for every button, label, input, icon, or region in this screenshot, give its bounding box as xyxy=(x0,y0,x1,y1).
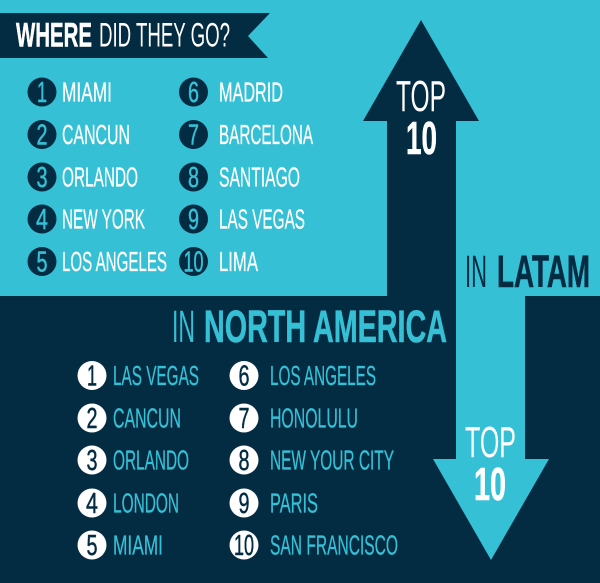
item 2: CANCUN xyxy=(113,402,181,434)
item 7: 7 xyxy=(188,120,199,152)
down arrow label: top 10: 10 xyxy=(474,458,506,510)
item 9: PARIS xyxy=(270,488,318,518)
heading: in latam xyxy=(465,246,590,297)
item 2: 2 xyxy=(36,120,48,152)
item 8: 8 xyxy=(188,162,199,194)
item 6 xyxy=(230,360,376,392)
item 8 xyxy=(230,444,394,477)
item 8: 8 xyxy=(238,445,250,477)
item 6: 6 xyxy=(188,77,199,109)
item 7 xyxy=(179,119,313,152)
item 5: 5 xyxy=(86,530,98,562)
banner: where did they go: DID THEY GO? xyxy=(99,16,230,54)
item 1: 1 xyxy=(87,360,97,392)
item 6: MADRID xyxy=(219,76,283,108)
banner: where did they go: WHERE xyxy=(16,16,92,54)
heading: in north america xyxy=(172,301,447,352)
item 6 xyxy=(179,76,283,109)
dark lower panel with up arrow xyxy=(0,20,479,583)
item 1: 1 xyxy=(37,77,47,109)
heading: in north america: NORTH AMERICA xyxy=(204,301,447,352)
item 9: LAS VEGAS xyxy=(219,204,305,234)
heading: in latam: IN xyxy=(465,246,487,297)
item 8: NEW YOUR CITY xyxy=(270,444,394,476)
item 7: BARCELONA xyxy=(219,119,313,150)
item 10: LIMA xyxy=(219,246,258,277)
item 8 xyxy=(179,162,300,194)
item 3 xyxy=(28,162,138,194)
item 6: LOS ANGELES xyxy=(270,360,376,391)
item 4: 4 xyxy=(36,204,48,236)
heading: in north america: IN xyxy=(172,301,195,352)
item 9: 9 xyxy=(188,204,199,236)
item 8: SANTIAGO xyxy=(219,162,300,192)
down arrow label: top 10 xyxy=(465,418,516,510)
list: north america destinations xyxy=(78,360,398,562)
item 1: MIAMI xyxy=(62,76,112,108)
down arrow xyxy=(433,296,549,560)
banner: where did they go xyxy=(0,13,270,58)
up arrow label: top 10: 10 xyxy=(406,112,437,164)
dark lower right panel xyxy=(456,296,600,583)
item 4: LONDON xyxy=(113,488,179,518)
item 3: 3 xyxy=(36,162,48,194)
item 4: 4 xyxy=(86,488,98,520)
item 7 xyxy=(230,402,358,435)
item 10 xyxy=(230,530,398,562)
item 9 xyxy=(230,488,318,520)
item 2 xyxy=(78,402,181,435)
item 5: 5 xyxy=(36,246,48,278)
item 4 xyxy=(78,488,179,520)
item 10: SAN FRANCISCO xyxy=(270,530,398,560)
item 2 xyxy=(28,119,130,152)
item 1: LAS VEGAS xyxy=(113,360,199,391)
list: latam destinations xyxy=(28,76,313,278)
item 5: LOS ANGELES xyxy=(62,246,167,277)
item 6: 6 xyxy=(238,360,250,392)
up arrow label: top 10 xyxy=(396,72,446,164)
item 9: 9 xyxy=(238,488,250,520)
item 5: MIAMI xyxy=(113,530,163,560)
item 4 xyxy=(28,204,145,236)
item 2: 2 xyxy=(86,403,98,435)
item 10: 10 xyxy=(234,530,254,562)
item 4: NEW YORK xyxy=(62,204,145,234)
item 3: 3 xyxy=(86,445,98,477)
item 3 xyxy=(78,444,189,477)
item 5 xyxy=(78,530,163,562)
item 10 xyxy=(179,246,258,278)
item 7: HONOLULU xyxy=(270,402,358,434)
item 10: 10 xyxy=(184,246,204,278)
item 5 xyxy=(28,246,167,278)
item 2: CANCUN xyxy=(62,119,130,150)
up arrow label: top 10: TOP xyxy=(396,72,446,121)
down arrow label: top 10: TOP xyxy=(465,418,516,467)
item 3: ORLANDO xyxy=(113,444,189,476)
item 7: 7 xyxy=(238,403,250,435)
item 1 xyxy=(78,360,199,392)
item 1 xyxy=(28,76,112,109)
item 3: ORLANDO xyxy=(62,162,138,192)
item 9 xyxy=(179,204,305,236)
